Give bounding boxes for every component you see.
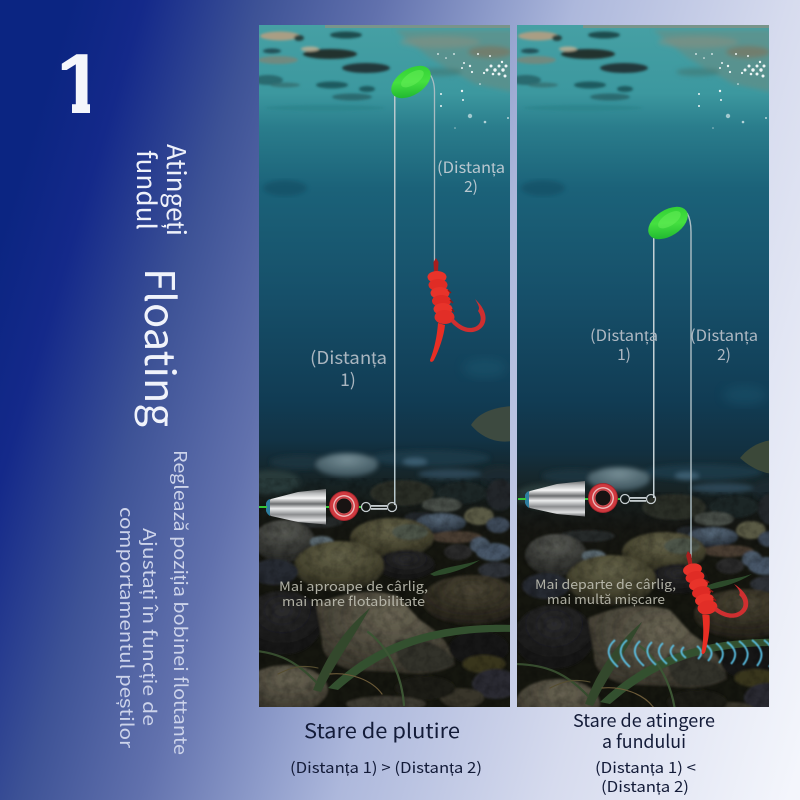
panel: bottom touch state [517, 25, 769, 707]
heading: Atingeți fundul [129, 144, 196, 236]
caption: closer to hook: mai mare flotabilitate [282, 591, 425, 610]
float line 1 [394, 95, 396, 505]
label: distance 1 [592, 328, 657, 363]
caption: closer to hook [280, 580, 428, 606]
number 1: 1 [56, 37, 103, 132]
green float [648, 206, 688, 240]
label: distance 1: 1) [617, 343, 631, 365]
formula: distance 1 less than distance 2: (Distanța 2) [601, 776, 689, 797]
sinker, bead and swivel [518, 481, 656, 516]
formula: distance 1 greater than distance 2: (Distanța 1) > (Distanța 2) [290, 757, 482, 778]
label: distance 2: (Distanța [437, 156, 505, 178]
title: bottom touch state [573, 707, 715, 754]
description text: Ajustați în funcție de [137, 528, 163, 726]
label: distance 2: 2) [717, 343, 731, 365]
label: distance 2: 2) [464, 175, 478, 197]
caption: farther from hook: mai multă mișcare [547, 589, 665, 608]
float line 2 [429, 73, 434, 262]
green float [391, 66, 431, 98]
hook with red worm [428, 258, 486, 362]
title: floating state: Stare de plutire [304, 715, 460, 744]
label: distance 1 [312, 350, 386, 390]
caption: farther from hook: Mai departe de cârlig, [535, 574, 676, 593]
caption: farther from hook [536, 578, 676, 606]
title: bottom touch state: Stare de atingere [573, 707, 715, 733]
label: distance 1: (Distanța [310, 345, 387, 370]
fish [740, 440, 769, 474]
description text [114, 450, 194, 755]
caption: closer to hook: Mai aproape de cârlig, [279, 576, 428, 595]
heading: Floating: Floating [133, 268, 193, 427]
sinker, bead and swivel [259, 489, 396, 524]
label: distance 1: 1) [340, 367, 356, 392]
description text: Reglează poziția bobinei flottante [168, 450, 194, 755]
formula: distance 1 less than distance 2 [595, 757, 696, 797]
label: distance 1: (Distanța [590, 324, 658, 346]
label: distance 2: (Distanța [690, 324, 758, 346]
sonar ripples [609, 640, 773, 667]
float line 1 [653, 236, 654, 498]
formula: distance 1 less than distance 2: (Distanța 1) < [595, 757, 696, 778]
label: distance 2 [692, 328, 757, 363]
fish [471, 406, 512, 442]
hook with red worm [683, 551, 748, 654]
panel: floating state [259, 25, 510, 707]
float line 2 [687, 213, 691, 558]
title: bottom touch state: a fundului [602, 728, 686, 754]
heading: Atingeți fundul: Atingeți [159, 144, 196, 236]
description text: comportamentul peștilor [114, 507, 140, 749]
label: distance 2 [438, 160, 504, 195]
heading: Atingeți fundul: fundul [129, 150, 166, 230]
